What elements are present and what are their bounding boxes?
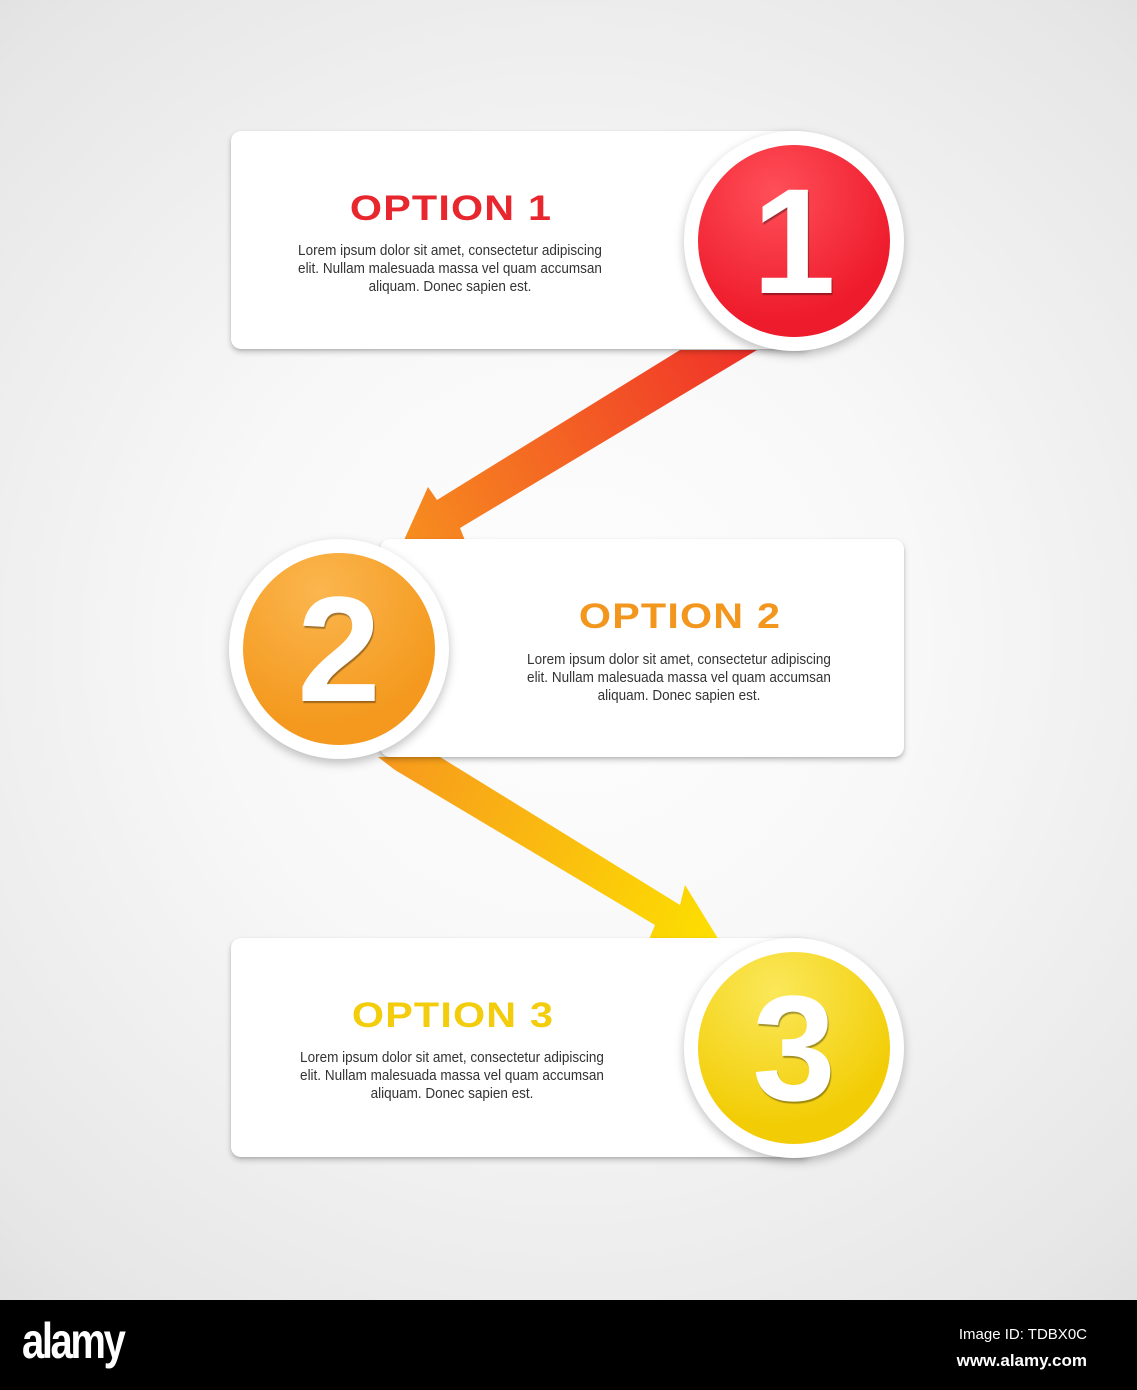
text block: option 3 bbox=[300, 1049, 604, 1102]
heading: option 3: OPTION 3 bbox=[352, 996, 554, 1035]
text block: option 2: aliquam. Donec sapien est. bbox=[598, 687, 760, 704]
icon: circle 3: 3 bbox=[752, 964, 836, 1132]
text block: option 1 bbox=[298, 242, 602, 295]
image id: www.alamy.com bbox=[957, 1351, 1087, 1370]
icon: circle 1 bbox=[684, 131, 904, 351]
text block: option 3: Lorem ipsum dolor sit amet, consectetur adipiscing bbox=[300, 1049, 604, 1066]
panel: option 1 bbox=[231, 131, 811, 349]
logo: alamy: alamy bbox=[22, 1313, 123, 1369]
image id bbox=[956, 1326, 1087, 1370]
panel: option 2 bbox=[380, 539, 904, 757]
footer bar bbox=[0, 1300, 1137, 1390]
text block: option 2 bbox=[527, 651, 831, 704]
arrow: 1 to 2 bbox=[395, 350, 757, 560]
icon: circle 1: 1 bbox=[752, 156, 836, 324]
heading: option 1: OPTION 1 bbox=[350, 189, 552, 228]
icon: circle 2 bbox=[229, 539, 449, 759]
text block: option 3: elit. Nullam malesuada massa vel quam accumsan bbox=[300, 1067, 604, 1084]
text block: option 2: elit. Nullam malesuada massa vel quam accumsan bbox=[527, 669, 831, 686]
text block: option 2: Lorem ipsum dolor sit amet, consectetur adipiscing bbox=[527, 651, 831, 668]
text block: option 1: aliquam. Donec sapien est. bbox=[369, 278, 531, 295]
panel: option 3 bbox=[231, 938, 811, 1157]
heading: option 2: OPTION 2 bbox=[579, 597, 781, 636]
icon: circle 2: 2 bbox=[297, 564, 381, 732]
arrow: 2 to 3 bbox=[378, 757, 722, 945]
text block: option 3: aliquam. Donec sapien est. bbox=[371, 1085, 533, 1102]
icon: circle 3 bbox=[684, 938, 904, 1158]
text block: option 1: Lorem ipsum dolor sit amet, consectetur adipiscing bbox=[298, 242, 602, 259]
text block: option 1: elit. Nullam malesuada massa vel quam accumsan bbox=[298, 260, 602, 277]
image id: Image ID: TDBX0C bbox=[959, 1326, 1087, 1343]
